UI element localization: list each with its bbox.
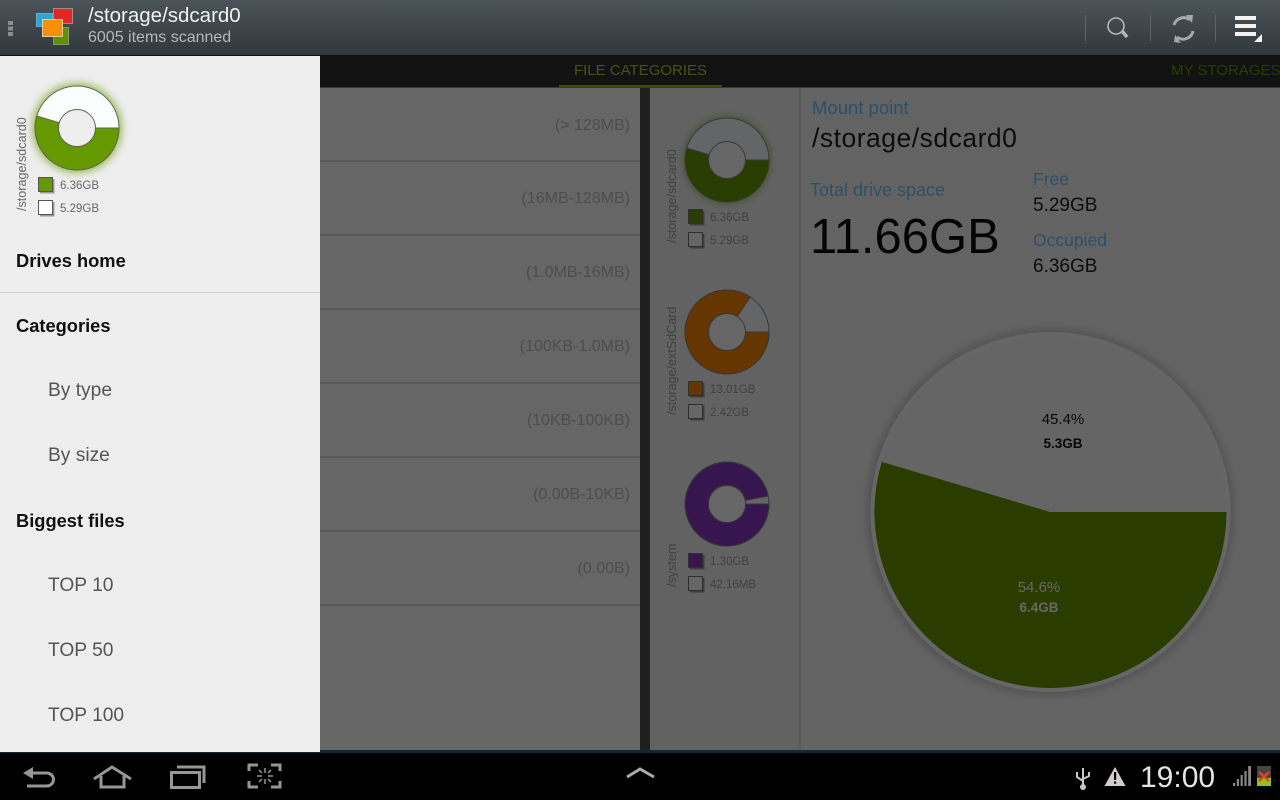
tab: my storages: MY STORAGES (1171, 62, 1280, 79)
legend swatches (688, 210, 702, 590)
donut: extSdCard (685, 290, 769, 374)
drawer drive chart: 5.29GB (60, 203, 99, 215)
tab: file categories (559, 61, 722, 87)
legend swatch shadows (690, 211, 704, 592)
legend values: 5.29GB (710, 235, 749, 247)
free value: 5.29GB (1033, 195, 1097, 216)
large pie chart (866, 328, 1234, 696)
menu: drives home: Drives home (16, 250, 126, 271)
legend values: 42.16MB (710, 579, 756, 591)
icon: app logo coloured squares (36, 8, 73, 45)
top action bar (0, 0, 1280, 56)
menu: categories: Categories (16, 315, 110, 336)
drive names: /system (665, 544, 679, 587)
menu: top 10: TOP 10 (48, 575, 113, 596)
drawer drive chart: 6.36GB (60, 180, 99, 192)
tab: file categories: FILE CATEGORIES (574, 62, 707, 79)
drive names: /storage/extSdCard (665, 306, 679, 415)
clock: 19:00 (1140, 761, 1215, 794)
drives column background (650, 88, 799, 750)
size label: 0.00B-10KB: (0.00B-10KB) (533, 486, 630, 503)
right panel background (801, 88, 1280, 750)
occupied slice labels (1018, 579, 1060, 615)
menu: top 50: TOP 50 (48, 640, 113, 661)
right panel edge (799, 88, 801, 750)
occupied slice labels: 6.4GB (1019, 600, 1059, 615)
action bar icons (1085, 15, 1262, 43)
size label: 0.00B: (0.00B) (578, 560, 630, 577)
drawer drive chart: /storage/sdcard0 (15, 117, 29, 211)
dim overlay over content (320, 55, 1280, 750)
donut: system (685, 462, 769, 546)
donut: sdcard0 (685, 118, 769, 202)
drive names: /storage/sdcard0 (665, 149, 679, 243)
drawer drive chart (15, 78, 128, 216)
pie slice: occupied (874, 462, 1226, 688)
items scanned subtitle: 6005 items scanned (88, 29, 231, 46)
size label: 10KB-100KB: (10KB-100KB) (527, 412, 630, 429)
free label: Free (1033, 169, 1069, 189)
free slice labels: 45.4% (1042, 411, 1084, 428)
free slice labels (1042, 411, 1084, 451)
size label: over 128MB: (> 128MB) (555, 117, 630, 134)
free slice labels: 5.3GB (1043, 436, 1083, 451)
occupied label: Occupied (1033, 230, 1107, 250)
icon: overflow dots (8, 21, 13, 36)
panel divider (640, 88, 650, 750)
content background (320, 55, 1280, 750)
legend values: 1.30GB (710, 556, 749, 568)
occupied value: 6.36GB (1033, 256, 1097, 277)
mount point label: Mount point (812, 97, 909, 118)
navigation icons (23, 764, 655, 789)
menu: biggest files: Biggest files (16, 510, 125, 531)
status icons (1076, 766, 1271, 790)
legend values: 6.36GB (710, 212, 749, 224)
total drive space value: 11.66GB (810, 210, 1000, 264)
size label: 16MB-128MB: (16MB-128MB) (522, 190, 630, 207)
menu: by type: By type (48, 380, 112, 401)
menu: top 100: TOP 100 (48, 705, 124, 726)
drive names (665, 149, 679, 587)
drives column charts (665, 113, 774, 592)
size label: 100KB-1.0MB: (100KB-1.0MB) (520, 338, 630, 355)
mount point value: /storage/sdcard0 (812, 123, 1017, 153)
menu: by size: By size (48, 445, 110, 466)
navigation drawer (0, 56, 320, 752)
size label: 1.0MB-16MB: (1.0MB-16MB) (526, 264, 630, 281)
legend values (710, 212, 756, 591)
tab bar (320, 55, 1280, 88)
total drive space label: Total drive space (810, 180, 945, 200)
system navigation bar (0, 750, 1280, 800)
path title: /storage/sdcard0 (88, 4, 241, 27)
occupied slice labels: 54.6% (1018, 579, 1060, 596)
legend values: 13.01GB (710, 384, 756, 396)
legend values: 2.42GB (710, 407, 749, 419)
